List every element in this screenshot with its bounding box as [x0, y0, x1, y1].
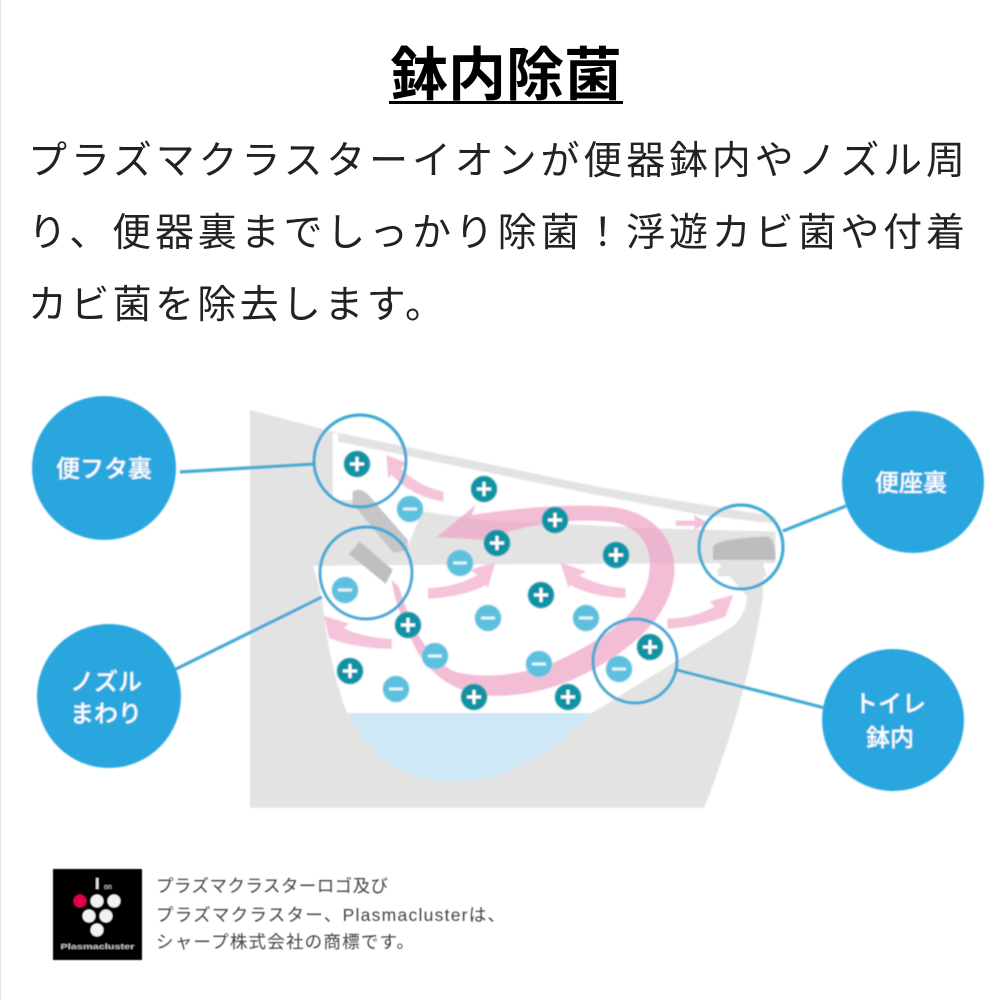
Plasmacluster logo: Plasmacluster	[60, 942, 135, 951]
callout: 便座裏: 便座裏	[875, 470, 947, 497]
trademark note	[156, 876, 505, 952]
callout: ノズルまわり: ノズル	[70, 669, 142, 696]
description text: り、便器裏までしっかり除菌！浮遊カビ菌や付着	[28, 212, 965, 255]
small pink arrows	[324, 455, 733, 649]
trademark note: シャープ株式会社の商標です。	[156, 932, 414, 952]
callout: トイレ鉢内: 鉢内	[866, 725, 914, 752]
Plasmacluster logo	[53, 869, 142, 960]
callout: 便フタ裏: 便フタ裏	[56, 456, 152, 483]
callout: 便座裏	[842, 411, 984, 553]
callout: トイレ鉢内: トイレ	[854, 691, 926, 718]
description text	[28, 140, 965, 327]
callout: ノズルまわり: まわり	[70, 701, 142, 728]
Plasmacluster logo: on	[104, 884, 112, 891]
nozzle	[352, 490, 408, 553]
callout: 便フタ裏	[32, 396, 176, 540]
plus ions	[337, 451, 663, 710]
callout: ノズルまわり	[37, 624, 181, 768]
trademark note: プラズマクラスターロゴ及び	[156, 876, 388, 896]
description text: プラズマクラスターイオンが便器鉢内やノズル周	[28, 140, 965, 183]
callout: トイレ鉢内	[822, 649, 964, 791]
trademark note: プラズマクラスター、Plasmaclusterは、	[156, 905, 505, 925]
minus ions	[332, 496, 632, 702]
seat detail	[713, 537, 776, 560]
toilet cross-section	[250, 410, 776, 808]
title: 鉢内除菌	[390, 43, 622, 108]
description text: カビ菌を除去します。	[28, 284, 444, 327]
pink swirl arrow	[392, 505, 675, 696]
toilet diagram	[32, 396, 984, 808]
connector lines and highlight rings	[170, 415, 846, 708]
